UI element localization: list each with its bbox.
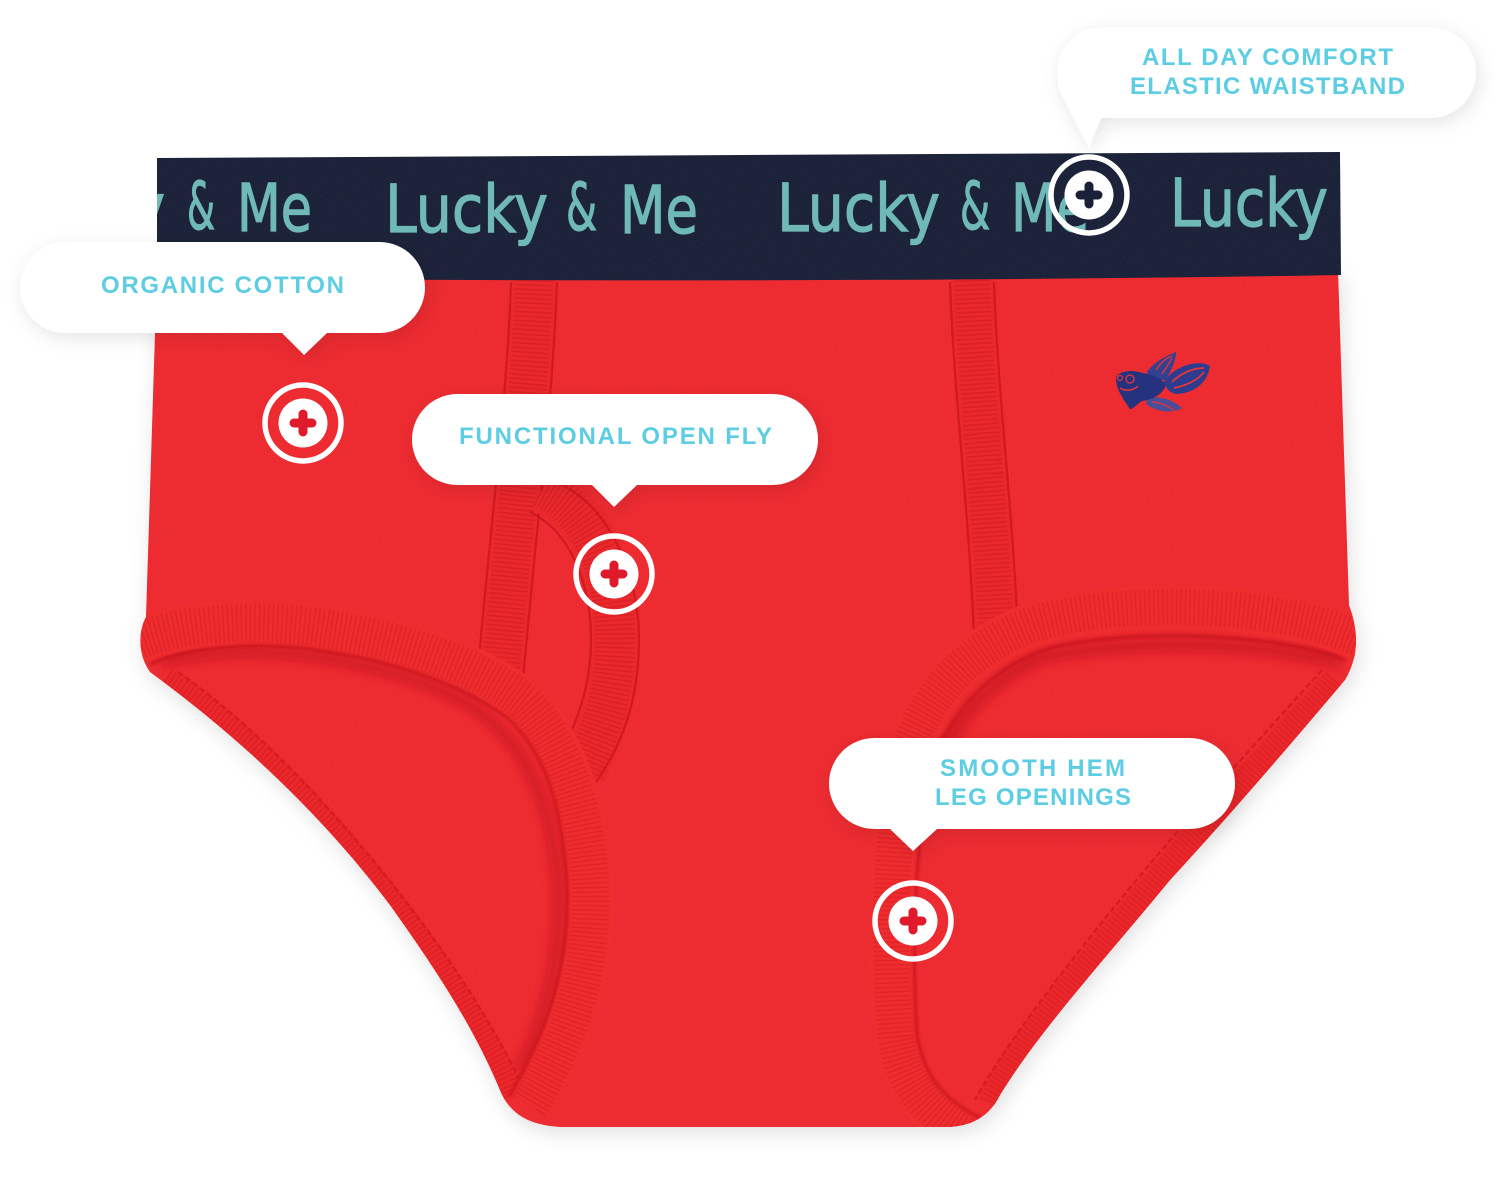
callout: functional open fly (412, 394, 818, 507)
marker: leg opening (875, 883, 951, 959)
callout: smooth hem leg openings: LEG OPENINGS (935, 784, 1131, 811)
callout: organic cotton: ORGANIC COTTON (101, 272, 344, 299)
right leg opening band (891, 607, 1362, 1135)
callout: smooth hem leg openings (829, 738, 1235, 851)
marker: waistband (1051, 157, 1127, 233)
callout: organic cotton (20, 242, 425, 355)
garment body (140, 270, 1356, 1127)
marker: organic cotton (265, 385, 341, 461)
garment: red briefs (138, 152, 1364, 1139)
waistband brand text: Me (620, 172, 698, 249)
right lower hem (975, 670, 1335, 1105)
fish tail (1164, 363, 1210, 394)
waistband brand text: Me (1011, 170, 1089, 247)
left lower hem (165, 672, 525, 1098)
callout: all day comfort elastic waistband (1057, 27, 1476, 148)
waist shadow under band (150, 276, 1345, 284)
waistband brand text: Me (237, 170, 312, 247)
callout: all day comfort elastic waistband: ALL DAY COMFORT (1142, 44, 1393, 71)
fish body (1116, 371, 1166, 409)
fish lower fin (1146, 397, 1182, 411)
left leg inner shading (162, 652, 559, 1070)
waistband brand text: Lucky (385, 171, 548, 248)
waistband brand text: & (566, 169, 597, 246)
waistband brand text: & (960, 168, 990, 245)
callout: functional open fly: FUNCTIONAL OPEN FLY (459, 423, 772, 450)
right placket (972, 280, 996, 640)
fly plackets (477, 280, 1018, 782)
right leg inner shading (946, 638, 1342, 738)
left leg opening band (135, 623, 591, 1105)
marker: open fly (576, 536, 652, 612)
waistband brand text: Lucky (2, 170, 165, 247)
waistband brand text (157, 175, 1327, 246)
callout: all day comfort elastic waistband: ELASTIC WAISTBAND (1130, 73, 1405, 100)
curved fly (534, 488, 542, 514)
waistband brand text: & (187, 168, 215, 245)
fish logo (1116, 352, 1210, 411)
left placket (500, 280, 534, 680)
waistband brand text: Lucky (777, 170, 940, 247)
callout: smooth hem leg openings: SMOOTH HEM (940, 755, 1125, 782)
waistband brand text: Lucky (1170, 165, 1328, 242)
fish dorsal fin (1147, 352, 1176, 380)
elastic waistband (157, 152, 1341, 280)
